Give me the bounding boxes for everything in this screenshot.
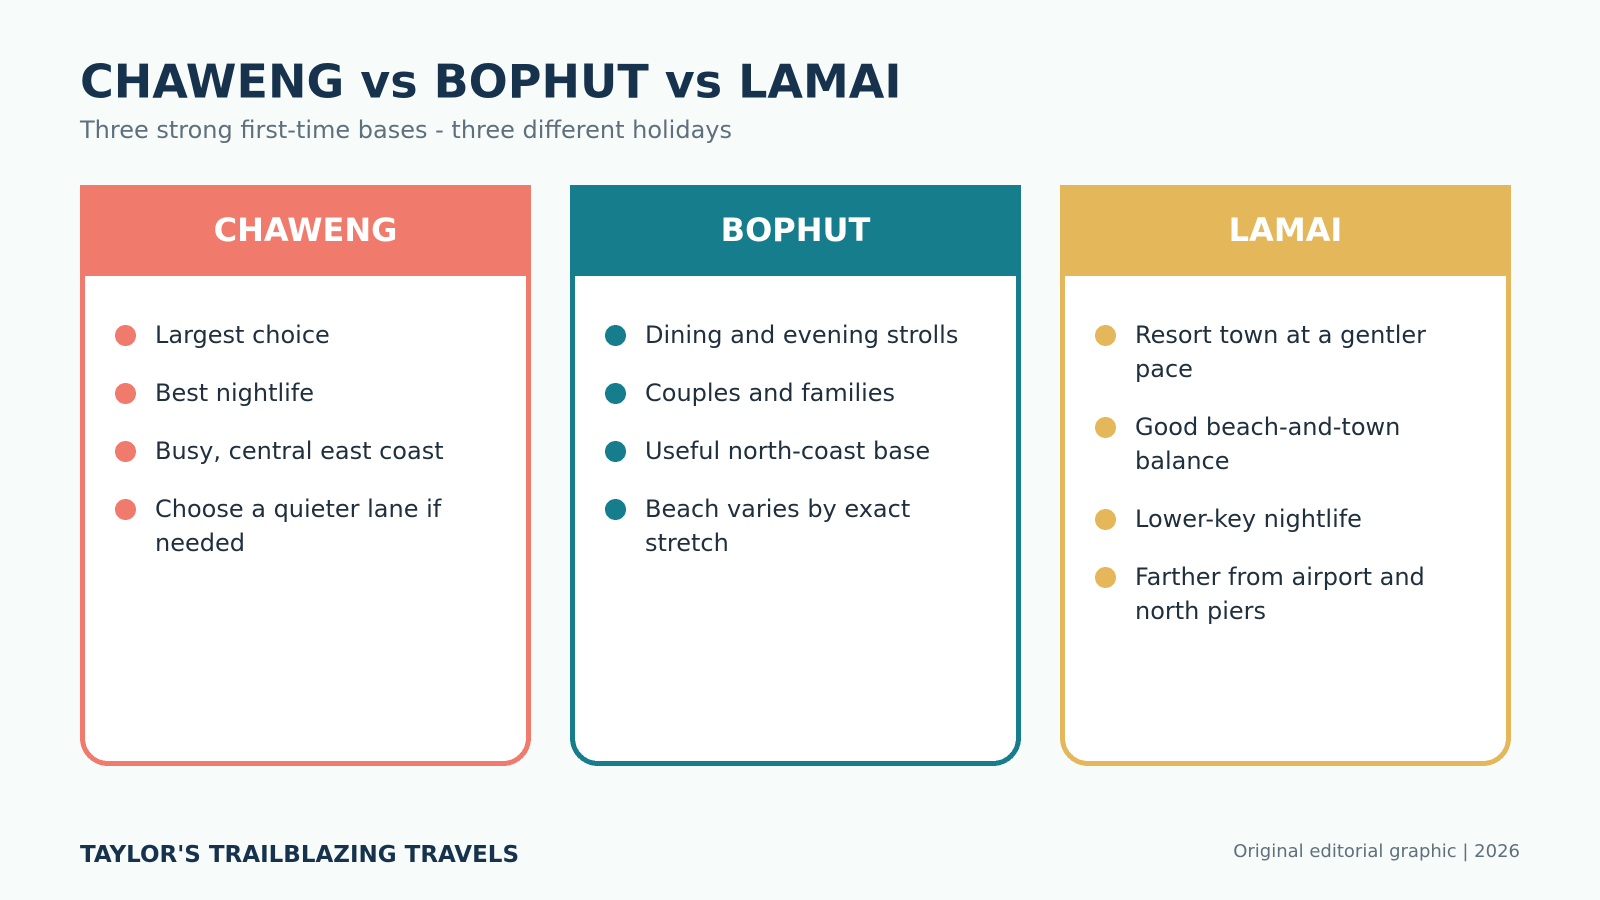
panel: Lamai	[1060, 185, 1511, 766]
Lamai list	[1095, 321, 1426, 625]
panel: Chaweng	[80, 185, 531, 766]
Lamai list: Good beach-and-town	[1135, 413, 1400, 441]
Chaweng list: Choose a quieter lane if	[155, 495, 442, 523]
Lamai header: LAMAI	[1229, 211, 1342, 249]
Chaweng list: Busy, central east coast	[155, 437, 444, 465]
Bophut list: Couples and families	[645, 379, 895, 407]
Bophut list	[605, 321, 958, 557]
Chaweng list: Largest choice	[155, 321, 330, 349]
Bophut list: Beach varies by exact	[645, 495, 910, 523]
Chaweng list	[115, 321, 444, 557]
Lamai list: north piers	[1135, 597, 1266, 625]
Chaweng header: CHAWENG	[214, 211, 397, 249]
Lamai list: Lower-key nightlife	[1135, 505, 1362, 533]
footer credit: Original editorial graphic | 2026	[1233, 841, 1520, 862]
subtitle: Three strong first-time bases - three different holidays	[79, 116, 732, 144]
Lamai list: balance	[1135, 447, 1230, 475]
title: CHAWENG vs BOPHUT vs LAMAI	[80, 54, 902, 108]
Chaweng list: Best nightlife	[155, 379, 314, 407]
Lamai list: Farther from airport and	[1135, 563, 1425, 591]
footer brand: TAYLOR'S TRAILBLAZING TRAVELS	[80, 842, 519, 868]
Lamai list: pace	[1135, 355, 1193, 383]
Bophut header: BOPHUT	[721, 211, 870, 249]
Chaweng list: needed	[155, 529, 245, 557]
Bophut list: stretch	[645, 529, 729, 557]
Bophut list: Dining and evening strolls	[645, 321, 958, 349]
panel: Bophut	[570, 185, 1021, 766]
Lamai list: Resort town at a gentler	[1135, 321, 1426, 349]
Bophut list: Useful north-coast base	[645, 437, 930, 465]
